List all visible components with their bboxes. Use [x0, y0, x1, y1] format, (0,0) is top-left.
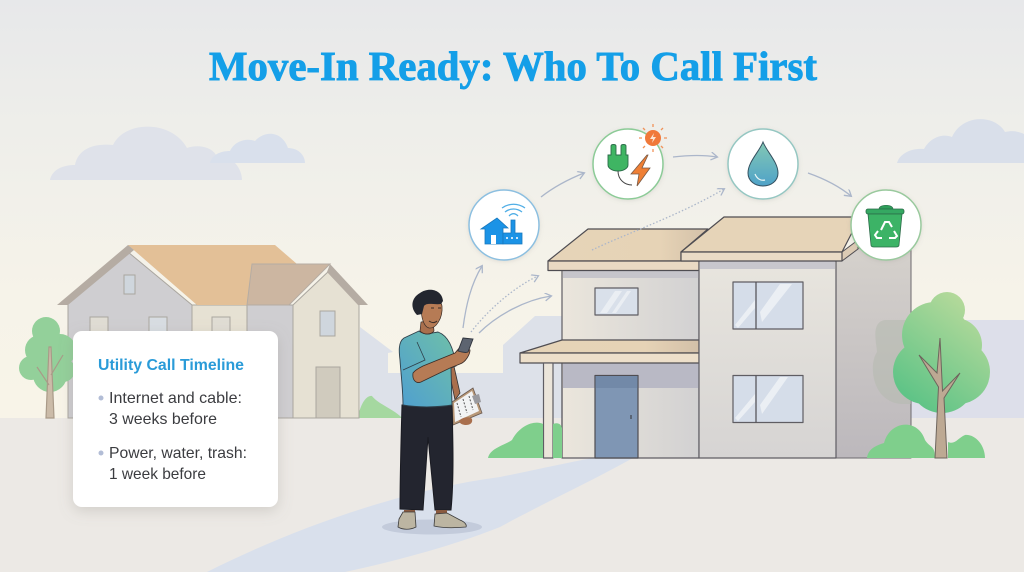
background sky: [0, 0, 1024, 420]
bullet 2: 1 week before: [109, 466, 206, 483]
ground: [0, 418, 1024, 572]
dotted arrow to water: [592, 189, 724, 250]
bullet 2: [98, 445, 247, 483]
arrow water to trash: [808, 173, 851, 196]
shirt: [399, 331, 456, 407]
cloud left: [50, 127, 242, 180]
left roof fascia: [548, 261, 699, 270]
clipboard: [452, 388, 482, 425]
left house windows: [90, 275, 335, 347]
left house orange roof: [128, 245, 297, 305]
ankles: [404, 510, 447, 515]
title: Move-In Ready: Who To Call First: [209, 43, 817, 89]
face: [429, 308, 441, 322]
icon: water: [728, 129, 798, 199]
upper roof: [681, 217, 860, 252]
shoes: [398, 512, 416, 529]
icon: internet: [469, 190, 539, 260]
left house middle wall: [247, 305, 293, 418]
bullet 1: [98, 390, 242, 428]
cloud right: [897, 119, 1024, 163]
left house gable edge: [57, 245, 134, 305]
timeline card: [73, 331, 278, 507]
left house cream section: [192, 305, 248, 418]
sleeve line: [403, 342, 425, 370]
left house front wing: [293, 270, 359, 418]
arrow phone to internet: [463, 266, 482, 328]
icon: power: [593, 124, 667, 199]
left house main wall: [68, 252, 192, 418]
left roof: [548, 229, 708, 261]
upper roof fascia: [681, 252, 842, 261]
bush by porch: [488, 423, 562, 458]
right section front wall: [699, 261, 836, 458]
distant houses: [358, 316, 1024, 418]
left house door: [316, 367, 340, 418]
dotted arrow phone to power: [471, 276, 538, 332]
left house middle roof: [247, 264, 330, 305]
porch shadow wall: [563, 363, 699, 388]
right tree: [867, 292, 990, 458]
back arm: [448, 362, 460, 400]
hair: [412, 290, 443, 315]
phone: [458, 338, 473, 352]
porch roof fascia: [520, 353, 699, 363]
left tree: [19, 317, 76, 418]
upper right window: [733, 282, 803, 329]
cloud middle: [210, 134, 305, 163]
arrow power to water: [673, 156, 717, 157]
arrows between services: [463, 156, 851, 333]
eave shadow right section: [700, 261, 835, 269]
ground shadow: [382, 520, 482, 534]
bullet 2: Power, water, trash:: [109, 445, 247, 462]
left house: [57, 245, 368, 418]
front door: [595, 376, 638, 458]
card heading: Utility Call Timeline: [98, 357, 244, 374]
bullet 1: Internet and cable:: [109, 390, 242, 407]
legs: [400, 405, 453, 510]
left section wall: [562, 270, 699, 458]
lower right window: [733, 376, 803, 422]
person with phone and clipboard: [382, 290, 482, 534]
upper left window: [595, 288, 638, 315]
icon: trash: [851, 190, 921, 260]
driveway path: [207, 458, 633, 572]
arrow phone to house: [479, 296, 551, 333]
upper roof side: [842, 240, 858, 261]
left house wing gable edge: [327, 264, 368, 305]
porch wall line: [561, 363, 563, 458]
forearm: [413, 346, 470, 383]
arrow internet to power: [541, 173, 584, 197]
head: [421, 298, 442, 328]
porch roof: [520, 340, 699, 353]
main house: [520, 217, 911, 458]
side wall: [836, 248, 911, 458]
eave shadow left section: [563, 270, 699, 278]
porch column: [544, 363, 553, 458]
neck: [420, 320, 434, 334]
bullet 1: 3 weeks before: [109, 411, 217, 428]
